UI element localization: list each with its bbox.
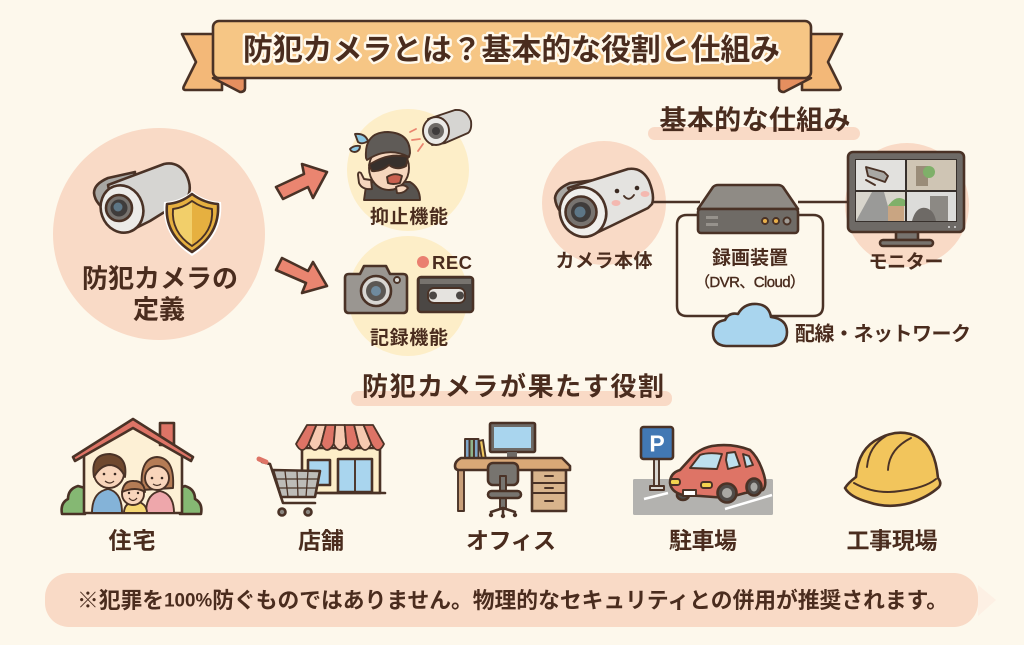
item: shop	[259, 425, 385, 554]
sparkle	[978, 585, 996, 616]
label: 店舗	[298, 528, 344, 554]
wiring	[653, 202, 848, 316]
recorder label	[695, 247, 805, 291]
definition text	[82, 264, 238, 324]
icon: video cassette	[418, 277, 473, 312]
item: construction	[845, 433, 940, 554]
footer note	[45, 573, 978, 627]
definition text: 防犯カメラの	[82, 264, 238, 294]
icon: shop with cart	[259, 425, 385, 516]
label: 記録機能	[370, 327, 448, 349]
panel: basic mechanism	[542, 106, 971, 346]
definition text: 定義	[133, 294, 185, 324]
item: parking	[633, 427, 773, 554]
icon: office desk	[455, 423, 570, 518]
recorder label: （DVR、Cloud）	[695, 274, 805, 291]
camera label: カメラ本体	[556, 250, 652, 272]
panel: roles	[62, 372, 940, 554]
icon: security camera	[94, 163, 190, 239]
label: 住宅	[108, 528, 156, 554]
icon: shield	[164, 191, 221, 256]
label: 駐車場	[669, 528, 737, 554]
item: office	[455, 423, 570, 554]
label: 抑止機能	[370, 206, 448, 228]
monitor label: モニター	[868, 251, 944, 273]
icon: camera body	[553, 169, 653, 243]
icon: cloud	[713, 304, 787, 346]
icon: hard hat	[845, 433, 940, 506]
panel: definition	[53, 128, 265, 340]
icon: rec indicator: REC	[432, 252, 472, 273]
title text: 防犯カメラとは？基本的な役割と仕組み	[243, 34, 780, 67]
icon: monitor	[848, 152, 964, 246]
title banner	[182, 21, 842, 92]
arrow: to deterrence	[276, 164, 327, 199]
footer note: ※犯罪を100%防ぐものではありません。物理的なセキュリティとの併用が推奨されます。	[77, 588, 948, 613]
panel: recording function	[345, 236, 473, 356]
heading: 基本的な仕組み	[660, 106, 850, 136]
item: house	[62, 419, 201, 554]
network label: 配線・ネットワーク	[795, 322, 971, 346]
monitor backdrop	[845, 143, 969, 267]
camera backdrop	[542, 141, 666, 265]
label: オフィス	[466, 528, 556, 554]
arrow: to recording	[276, 258, 327, 293]
icon: house with family	[62, 419, 201, 514]
panel: deterrence function	[347, 109, 471, 231]
label: 工事現場	[846, 528, 938, 554]
icon: parking lot with car: P	[649, 430, 665, 456]
icon: photo camera	[345, 266, 407, 313]
heading: 防犯カメラが果たす役割	[362, 372, 664, 402]
icon: small camera	[423, 110, 471, 145]
icon: alert lines	[410, 129, 423, 151]
recorder label: 録画装置	[712, 247, 788, 269]
icon: sweat drops	[350, 134, 368, 152]
icon: thief	[358, 132, 420, 200]
icon: recorder	[698, 185, 798, 233]
